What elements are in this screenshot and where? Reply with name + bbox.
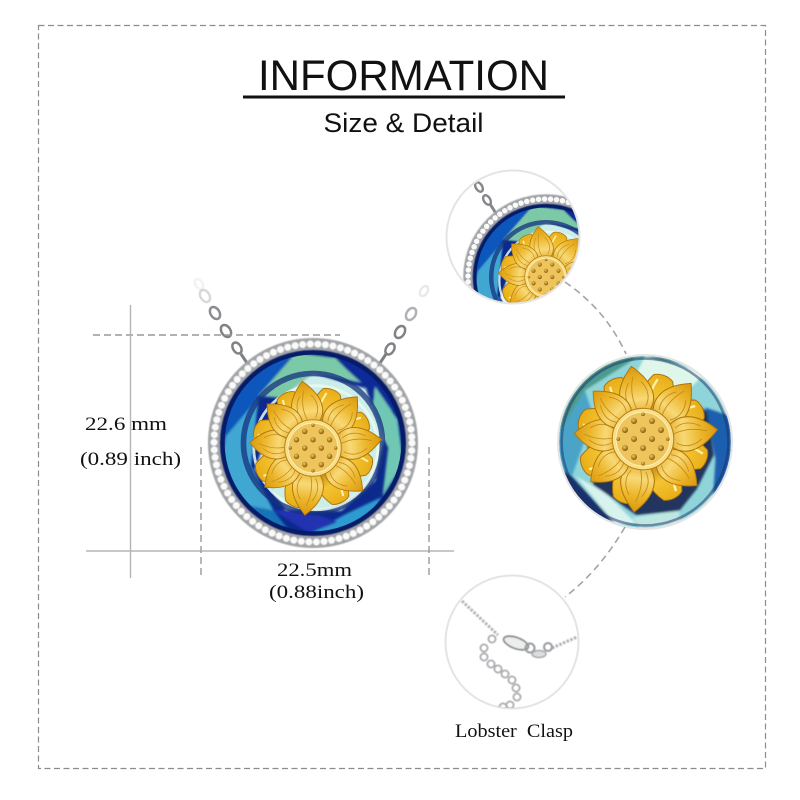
width guide left — [200, 447, 202, 578]
width guide right — [428, 447, 430, 578]
circle outline — [446, 170, 580, 304]
sunflower — [573, 364, 719, 514]
height label — [80, 414, 181, 470]
height dimension line — [130, 305, 132, 578]
bottom dimension line — [86, 550, 454, 552]
dashed connector: centre circle to clasp circle — [565, 527, 625, 597]
clasp label: Lobster Clasp — [455, 721, 573, 742]
detail circle: lobster clasp — [446, 576, 578, 711]
close-up contents — [462, 181, 578, 302]
dashed connector: top circle to centre circle — [565, 282, 626, 354]
crystal — [219, 349, 407, 537]
title underline — [243, 96, 565, 98]
width label: 22.5mm — [277, 560, 352, 581]
crystal — [559, 356, 731, 528]
chain: right — [378, 284, 430, 366]
detail circle: crystal and sunflower — [558, 355, 732, 529]
height label: (0.89 inch) — [80, 449, 181, 470]
detail circle: top pendant close-up — [446, 170, 580, 304]
sunflower — [248, 379, 383, 517]
top dimension guide — [93, 334, 340, 336]
width label — [269, 560, 364, 603]
title: INFORMATION — [258, 52, 549, 100]
height label: 22.6 mm — [85, 414, 167, 435]
width label: (0.88inch) — [269, 582, 364, 603]
chain: left — [193, 277, 249, 366]
circle outline — [558, 355, 732, 529]
subtitle: Size & Detail — [324, 108, 484, 138]
circle outline — [446, 576, 578, 708]
halo bead ring — [214, 344, 412, 542]
clasp chain — [462, 601, 577, 711]
main pendant necklace — [193, 277, 430, 542]
